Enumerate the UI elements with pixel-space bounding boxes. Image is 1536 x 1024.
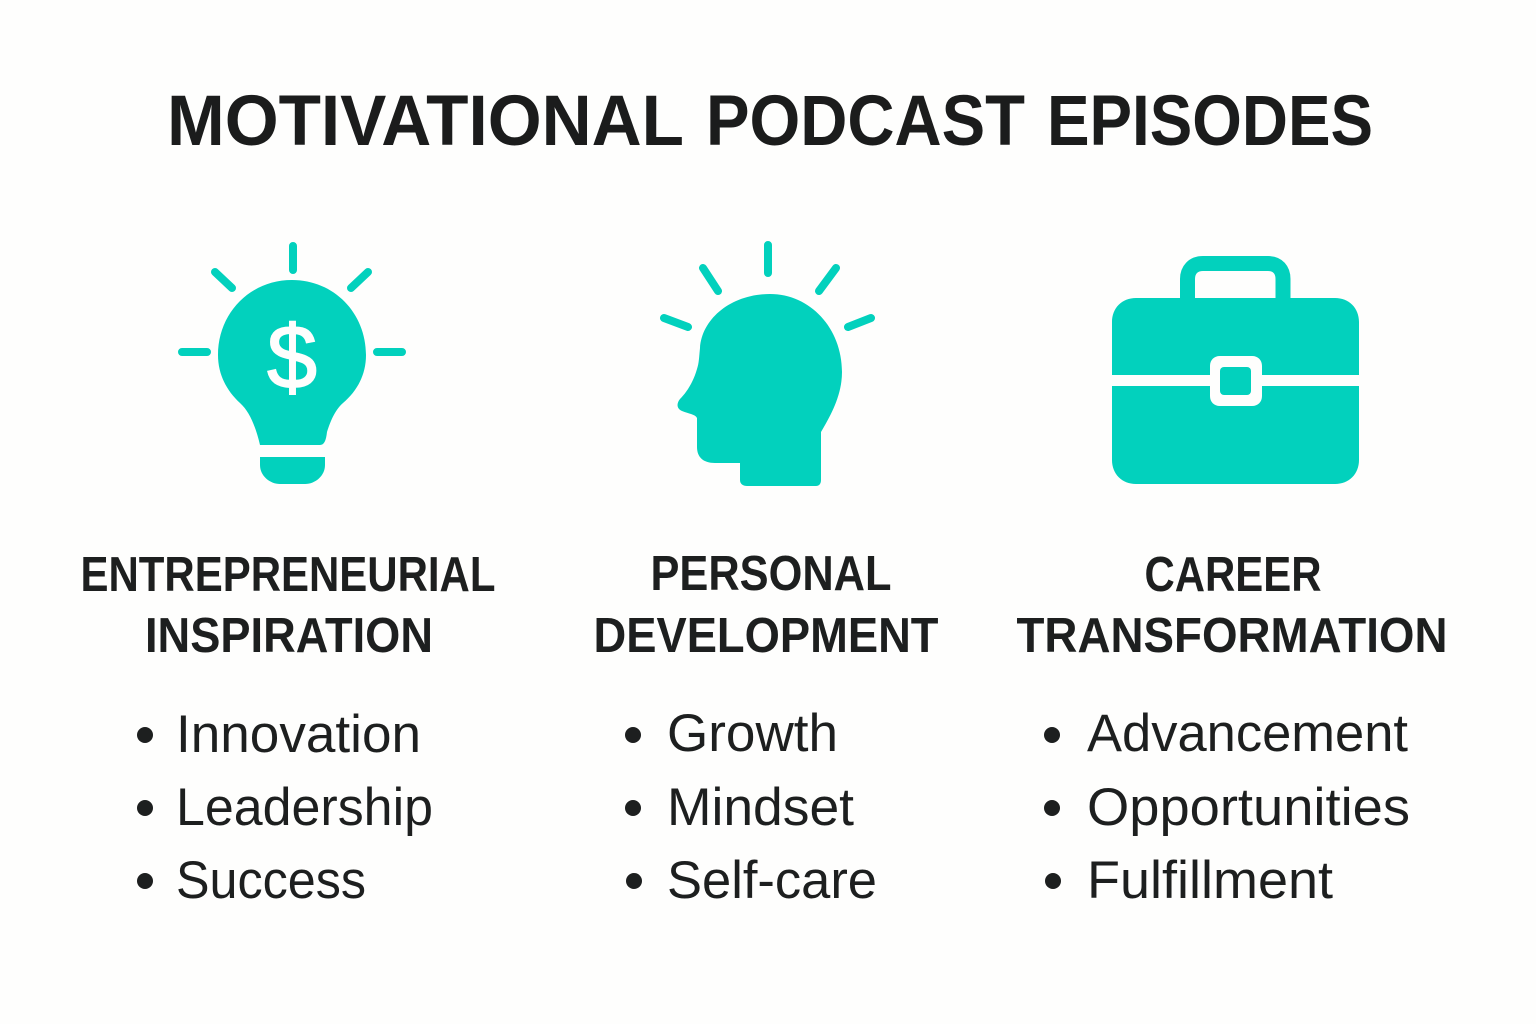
icon: light bulb with dollar sign: $ [267,308,317,408]
icon: light bulb with dollar sign [182,246,402,484]
bullet list: career transformation: Advancement [1087,704,1408,763]
heading: career transformation: CAREER [1144,548,1322,602]
bullet list: entrepreneurial inspiration: Success [176,851,366,910]
title [167,82,1373,161]
bullet list: entrepreneurial inspiration [137,705,433,910]
bullet list: personal development: Growth [667,704,838,763]
heading: career transformation [1016,548,1448,663]
bullet list: career transformation: Opportunities [1087,778,1410,837]
title: EPISODES [1047,82,1373,161]
panel: entrepreneurial inspiration [80,246,496,910]
panel: personal development [594,245,939,910]
bullet list: career transformation [1044,704,1410,910]
heading: personal development: DEVELOPMENT [594,609,939,663]
bullet list: entrepreneurial inspiration: Leadership [176,778,433,837]
icon: head with radiating lines [664,245,871,486]
heading: career transformation: TRANSFORMATION [1016,609,1448,663]
bullet list: personal development: Mindset [667,778,854,837]
title: MOTIVATIONAL [167,82,684,161]
bullet list: personal development [625,704,877,910]
bullet list: entrepreneurial inspiration: Innovation [176,705,421,764]
title: PODCAST [706,82,1025,161]
bullet list: career transformation: Fulfillment [1087,851,1333,910]
heading: entrepreneurial inspiration: ENTREPRENEURIAL [80,548,496,602]
panel: career transformation [1016,264,1448,910]
heading: entrepreneurial inspiration [80,548,496,663]
heading: entrepreneurial inspiration: INSPIRATION [145,609,433,663]
icon: briefcase [1112,264,1359,484]
heading: personal development: PERSONAL [650,547,892,601]
bullet list: personal development: Self-care [667,851,877,910]
heading: personal development [594,547,939,663]
